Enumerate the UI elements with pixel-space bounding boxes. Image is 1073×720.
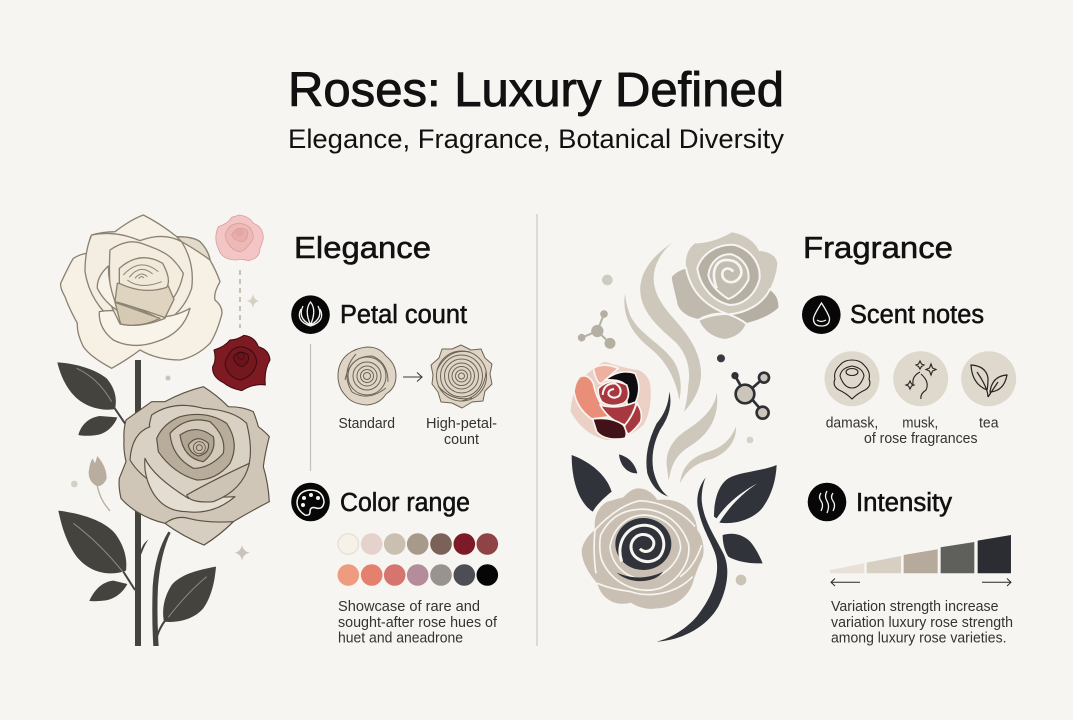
- section: petal count: [291, 295, 497, 471]
- label: high-petal-count: count: [444, 432, 479, 448]
- rose bud: [71, 456, 250, 560]
- scent swooshes: [624, 242, 736, 483]
- icon: palette: [291, 483, 330, 521]
- heading: color range: Color range: [340, 489, 470, 517]
- icon: petals: [291, 295, 330, 334]
- swatches: [338, 533, 498, 586]
- rose: standard: [338, 347, 396, 405]
- labels: scent notes: damask,: [826, 416, 878, 432]
- intensity scale: [830, 535, 1011, 573]
- label: high-petal-count: High-petal-: [426, 416, 497, 432]
- illustration: elegance roses: [57, 215, 270, 646]
- note: tea: [961, 351, 1016, 406]
- stems and leaves: [57, 360, 216, 646]
- arrow: left: [831, 578, 860, 586]
- caption: intensity: among luxury rose varieties.: [831, 630, 1006, 646]
- molecule: dark: [717, 354, 769, 443]
- molecule: grey: [578, 275, 615, 349]
- rose: red and coral: [571, 362, 651, 440]
- arrow: [403, 372, 422, 382]
- rose: high petal count: [431, 345, 492, 408]
- section: scent notes: [802, 295, 1016, 447]
- section: color range: [291, 483, 498, 646]
- rose: dark red: [213, 335, 270, 391]
- caption: color range: Showcase of rare and: [338, 599, 480, 615]
- heading: intensity: Intensity: [856, 489, 952, 517]
- rose: pink: [216, 215, 263, 261]
- heading: Fragrance: Fragrance: [803, 230, 953, 265]
- caption: color range: huet and aneadrone: [338, 630, 463, 646]
- dashed connector: [239, 270, 241, 328]
- rose: taupe bloom: [119, 387, 269, 545]
- labels: scent notes: tea: [979, 416, 999, 432]
- subtitle: Elegance, Fragrance, Botanical Diversity: [288, 124, 785, 154]
- heading: petal count: Petal count: [340, 301, 467, 329]
- caption: intensity: variation luxury rose strength: [831, 615, 1013, 631]
- note: musk: [893, 351, 948, 406]
- caption: color range: sought-after rose hues of: [338, 615, 498, 631]
- note: damask: [824, 351, 880, 406]
- title: Roses: Luxury Defined: [288, 64, 784, 117]
- labels: scent notes: musk,: [902, 416, 938, 432]
- heading: scent notes: Scent notes: [850, 301, 984, 329]
- rose: beige and dark: [582, 488, 704, 609]
- caption: intensity: Variation strength increase: [831, 599, 998, 615]
- icon: drop: [802, 295, 841, 334]
- rose: cream bloom: [61, 215, 222, 368]
- label: standard: Standard: [338, 416, 395, 432]
- icon: scent waves: [808, 483, 846, 521]
- illustration: fragrance: [571, 232, 779, 642]
- section: intensity: [808, 483, 1013, 646]
- labels: scent notes: of rose fragrances: [864, 431, 978, 447]
- arrow: right: [982, 578, 1011, 586]
- heading: Elegance: Elegance: [294, 230, 431, 265]
- rose: grey: [671, 232, 779, 340]
- sparkle: [247, 294, 259, 308]
- stems and leaves: dark: [572, 392, 777, 642]
